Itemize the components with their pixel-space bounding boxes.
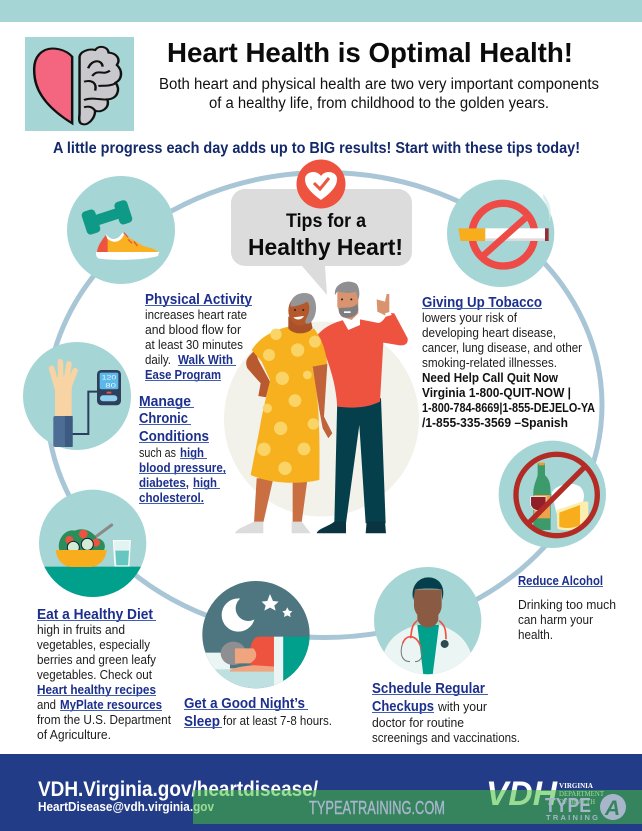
tagline: A little progress each day adds up to BIG results! Start with these tips today! <box>53 140 580 157</box>
footer email: HeartDisease@vdh.virginia.gov <box>38 799 215 814</box>
text: giving up tobacco: Virginia 1-800-QUIT-NOW | <box>422 386 571 400</box>
text: reduce alcohol: Drinking too much <box>518 598 616 612</box>
text: manage chronic conditions: cholesterol. <box>139 491 204 505</box>
text: giving up tobacco: 1-800-784-8669|1-855-DEJELO-YA <box>422 401 595 415</box>
tip: regular checkups <box>372 567 520 745</box>
icon: blood pressure monitor: 120 <box>102 375 117 382</box>
watermark logo: A <box>604 797 620 820</box>
text: healthy diet: vegetables. Check out <box>37 668 152 682</box>
icon: doctor <box>374 567 481 677</box>
text: giving up tobacco: developing heart disease, <box>422 326 556 340</box>
icon: heart and brain logo <box>25 37 134 131</box>
tip: giving up tobacco <box>422 180 595 430</box>
text: reduce alcohol <box>518 574 616 642</box>
intro text: Both heart and physical health are two very important components <box>159 76 599 93</box>
tip: reduce alcohol <box>499 441 616 642</box>
text: giving up tobacco: cancer, lung disease, and other <box>422 341 582 355</box>
text: regular checkups: with your <box>437 700 487 714</box>
text: physical activity: at least 30 minutes <box>145 338 243 352</box>
text: sleep <box>184 696 332 730</box>
text: physical activity: Ease Program <box>145 368 221 382</box>
text: manage chronic conditions: Manage <box>139 394 191 410</box>
text: regular checkups: Schedule Regular <box>372 681 485 697</box>
icon: no alcohol <box>499 441 606 548</box>
text: physical activity: increases heart rate <box>145 308 247 322</box>
speech bubble: Tips for a <box>286 211 366 232</box>
watermark band <box>193 790 642 824</box>
watermark logo: TRAINING <box>546 813 598 822</box>
intro text: of a healthy life, from childhood to the golden years. <box>209 95 549 112</box>
text: healthy diet: Eat a Healthy Diet <box>37 607 153 623</box>
text: physical activity: Walk With <box>178 353 233 367</box>
text: manage chronic conditions: Conditions <box>139 429 209 445</box>
text: sleep: for at least 7-8 hours. <box>223 714 332 728</box>
text: healthy diet: Heart healthy recipes <box>37 683 156 697</box>
tip: physical activity <box>67 176 252 382</box>
title: Heart Health is Optimal Health! <box>167 37 573 68</box>
top band <box>0 0 642 22</box>
text: sleep: Sleep <box>184 714 220 730</box>
text: giving up tobacco <box>422 295 595 430</box>
VDH logo: DEPARTMENT <box>559 789 604 798</box>
text: physical activity: Physical Activity <box>145 292 252 308</box>
tip: sleep <box>184 581 332 730</box>
beige backdrop circle <box>224 322 419 516</box>
VDH logo: OF HEALTH <box>559 797 596 806</box>
icon: sleeping person at night <box>200 581 313 690</box>
text: healthy diet: MyPlate resources <box>60 698 162 712</box>
icon: blood pressure monitor <box>23 342 131 450</box>
speech bubble: Healthy Heart! <box>248 234 403 260</box>
text: giving up tobacco: /1-855-335-3569 –Spanish <box>422 416 568 430</box>
text: physical activity: and blood flow for <box>145 323 241 337</box>
text: regular checkups <box>372 681 520 745</box>
text: healthy diet: vegetables, especially <box>37 638 151 652</box>
VDH logo: VDH <box>486 775 558 813</box>
text: healthy diet: and <box>37 698 56 712</box>
icon: salad bowl <box>39 490 146 597</box>
ring connecting the tips <box>47 172 602 638</box>
text: sleep: Get a Good Night’s <box>184 696 305 712</box>
watermark text: TYPEATRAINING.COM <box>309 798 445 818</box>
text: healthy diet: from the U.S. Department <box>37 713 171 727</box>
speech bubble <box>231 189 412 295</box>
illustration: older couple <box>235 282 408 533</box>
text: reduce alcohol: Reduce Alcohol <box>518 574 603 588</box>
intro text <box>159 76 599 112</box>
text: physical activity: daily. <box>145 353 171 367</box>
footer web address: VDH.Virginia.gov/heartdisease/ <box>38 778 318 801</box>
icon: heart check badge <box>296 160 346 208</box>
watermark logo <box>545 794 626 822</box>
text: healthy diet: berries and green leafy <box>37 653 157 667</box>
text: manage chronic conditions: such as <box>139 446 176 460</box>
text: healthy diet: of Agriculture. <box>37 728 111 742</box>
icon: dumbbell and shoe <box>67 176 175 284</box>
icon: no smoking <box>447 180 554 287</box>
text: healthy diet: high in fruits and <box>37 623 125 637</box>
text: manage chronic conditions: high <box>193 476 217 490</box>
text: regular checkups: doctor for routine <box>372 716 464 730</box>
text: physical activity <box>145 292 252 382</box>
text: giving up tobacco: Need Help Call Quit Now <box>422 371 558 385</box>
watermark logo: TYPE <box>545 795 591 817</box>
text: healthy diet <box>37 607 171 742</box>
icon: blood pressure monitor: 80 <box>105 382 116 389</box>
text: reduce alcohol: can harm your <box>518 613 593 627</box>
text: manage chronic conditions: high <box>180 446 204 460</box>
text: giving up tobacco: smoking-related illnesses. <box>422 356 557 370</box>
text: regular checkups: Checkups <box>372 699 434 715</box>
tip: manage chronic conditions <box>23 342 226 505</box>
text: reduce alcohol: health. <box>518 628 553 642</box>
text: manage chronic conditions: blood pressure, <box>139 461 226 475</box>
VDH logo <box>486 775 604 813</box>
text: manage chronic conditions <box>139 394 226 505</box>
text: manage chronic conditions: diabetes, <box>139 476 189 490</box>
tip: healthy diet <box>33 490 171 742</box>
text: giving up tobacco: lowers your risk of <box>422 311 517 325</box>
footer band <box>0 754 642 831</box>
text: manage chronic conditions: Chronic <box>139 411 188 427</box>
text: giving up tobacco: Giving Up Tobacco <box>422 295 542 311</box>
VDH logo: VIRGINIA <box>559 781 594 790</box>
man <box>317 282 408 533</box>
text: regular checkups: screenings and vaccinations. <box>372 731 520 745</box>
woman <box>235 293 332 533</box>
